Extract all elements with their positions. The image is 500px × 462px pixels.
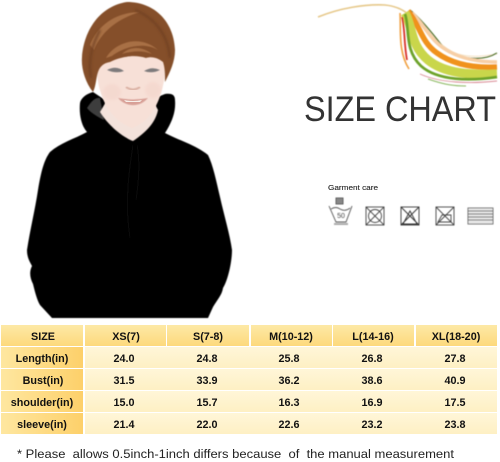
table header row: XS(7) (112, 331, 140, 343)
table row: length: 24.0 (113, 353, 135, 365)
swoosh green stripe (405, 14, 497, 79)
swoosh top arc (318, 5, 408, 17)
eyes (107, 68, 160, 72)
table row: shoulder: 16.3 (278, 397, 300, 409)
table row: sleeve (1, 413, 497, 434)
table row: bust (1, 369, 497, 390)
table row: sleeve: 23.2 (361, 419, 383, 431)
icon: wash 50 (329, 198, 352, 225)
table row: shoulder (1, 391, 497, 412)
table row: sleeve: 23.8 (444, 419, 466, 431)
face (97, 45, 166, 128)
icon: do not iron (436, 207, 454, 225)
hair highlights (90, 12, 158, 58)
teeth (124, 100, 142, 102)
photo: boy in black hoodie (27, 2, 232, 318)
table header row: SIZE (31, 331, 55, 343)
face shading right (145, 82, 161, 98)
table row: length: 25.8 (278, 353, 300, 365)
table header row (1, 325, 497, 346)
hood lining (87, 98, 104, 120)
hoodie body (27, 92, 232, 318)
table row: sleeve: sleeve(in) (17, 419, 67, 431)
table header row: L(14-16) (352, 331, 394, 343)
swoosh pink stripe (420, 74, 497, 83)
footnote: * Please allows 0.5inch-1inch differs because of the manual measurement (17, 447, 455, 461)
mouth (118, 98, 148, 105)
table row: bust: 31.5 (113, 375, 135, 387)
table header row: XL(18-20) (432, 331, 481, 343)
swoosh thin green (428, 79, 466, 86)
table: size chart (0, 324, 498, 436)
table row: shoulder: 17.5 (444, 397, 466, 409)
table row: bust: 33.9 (196, 375, 218, 387)
colored swoosh decoration (318, 5, 497, 86)
swoosh lime band (405, 13, 497, 74)
hair (82, 2, 175, 92)
swoosh orange tail (400, 13, 409, 69)
drawstring (127, 145, 139, 238)
table row: shoulder: 15.7 (196, 397, 218, 409)
hair dark streaks (90, 10, 170, 78)
table row: bust: 40.9 (444, 375, 466, 387)
table row: sleeve: 21.4 (113, 419, 135, 431)
table row: length: 26.8 (361, 353, 383, 365)
table header row: M(10-12) (269, 331, 313, 343)
table row: shoulder: shoulder(in) (11, 397, 74, 409)
table row: length: 24.8 (196, 353, 218, 365)
table header row: S(7-8) (193, 331, 223, 343)
icon: wash 50: 50 (337, 213, 345, 220)
icon: do not bleach (401, 207, 419, 225)
table row: bust: 36.2 (278, 375, 300, 387)
swoosh peach stripe (412, 13, 497, 62)
table background (0, 324, 498, 436)
table row: shoulder: 16.9 (361, 397, 383, 409)
table row: sleeve: 22.6 (278, 419, 300, 431)
icon: do not tumble dry (366, 207, 384, 225)
table row: bust: 38.6 (361, 375, 383, 387)
swoosh pale outer stripe (412, 11, 497, 56)
neck (100, 95, 158, 141)
table row: sleeve: 22.0 (196, 419, 218, 431)
table row: length: 27.8 (444, 353, 466, 365)
swoosh orange stripe (408, 11, 497, 67)
table row: length: Length(in) (16, 353, 69, 365)
swoosh dark green stripe (410, 10, 497, 58)
table row: bust: Bust(in) (23, 375, 64, 387)
face shading (103, 84, 121, 100)
nose (126, 87, 140, 90)
table row: length (1, 347, 497, 368)
swoosh red stripe (402, 17, 407, 60)
text: garment care: Garment care (328, 185, 378, 192)
icon: dry flat lines (468, 208, 493, 224)
table row: shoulder: 15.0 (113, 397, 135, 409)
